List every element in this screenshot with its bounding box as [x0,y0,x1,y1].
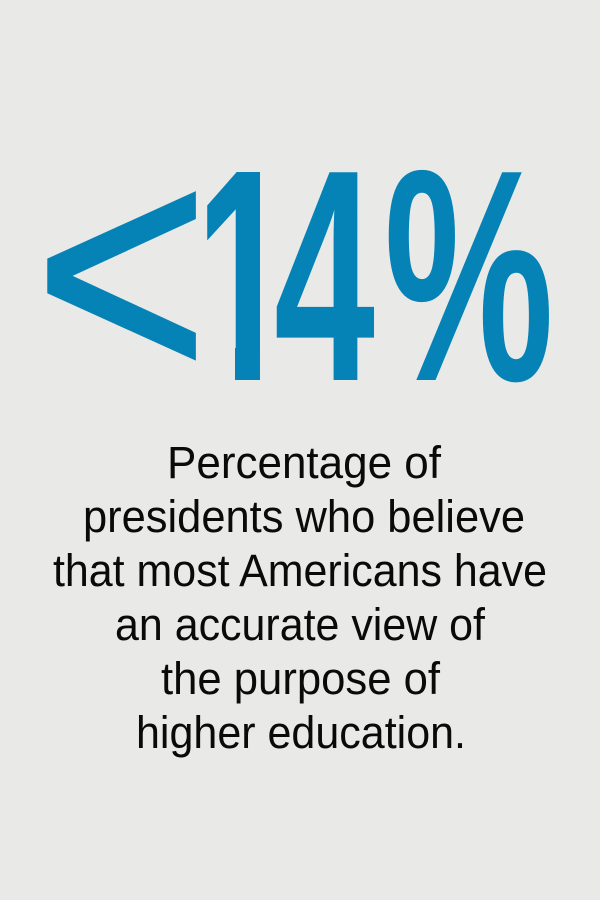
headline statistic: less than 14 percent [47,170,549,382]
description text: that most Americans have [53,545,547,596]
description text: higher education. [136,707,466,758]
description text: the purpose of [161,653,440,704]
description text: presidents who believe [83,491,525,542]
description text: Percentage of [167,437,441,488]
digit 4: 4 [274,107,376,444]
less-than sign: < [34,90,209,452]
description text [53,437,547,758]
description text: an accurate view of [115,599,485,650]
digit 1: 1 [196,107,292,444]
